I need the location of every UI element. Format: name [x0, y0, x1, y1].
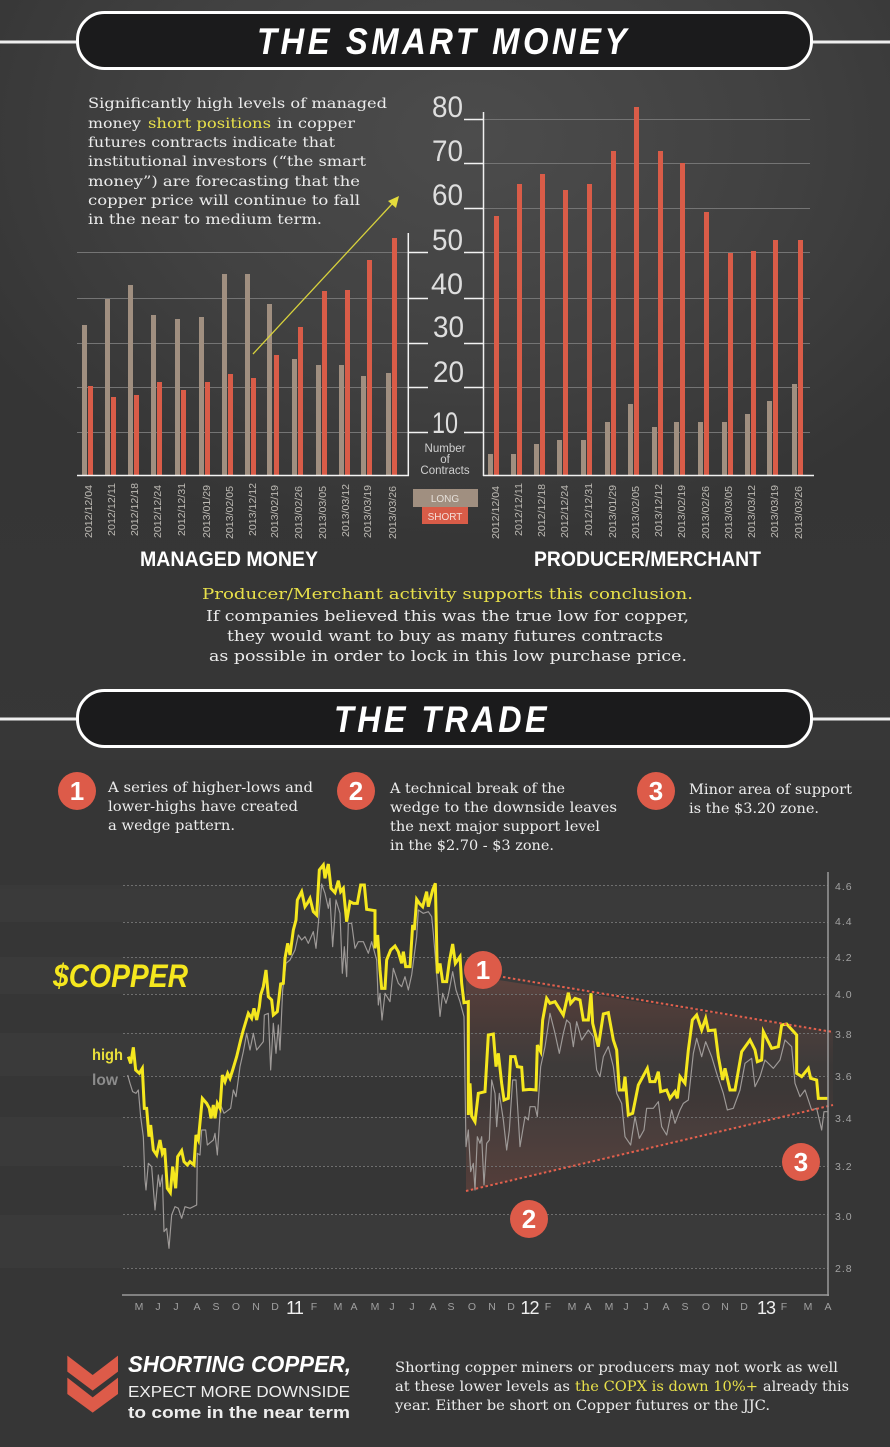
- callout: shorting copper: [128, 1351, 351, 1422]
- long bars: managed money: [82, 274, 391, 475]
- price axis labels: 4.6: [835, 881, 853, 893]
- month axis labels: M: [568, 1301, 576, 1313]
- month axis labels: O: [468, 1301, 476, 1313]
- step 2: the next major support level: [390, 819, 601, 835]
- conclusion text block: [202, 587, 693, 665]
- month axis labels: N: [252, 1301, 260, 1313]
- date labels: managed money: 2013/03/19: [362, 485, 374, 538]
- price axis labels: [835, 881, 853, 1275]
- intro text block: money: [88, 116, 141, 132]
- chart title: producer/merchant: PRODUCER/MERCHANT: [534, 548, 761, 571]
- background bands: [0, 885, 828, 1268]
- date labels: managed money: 2013/03/12: [340, 484, 352, 537]
- chart marker 1: 1: [476, 955, 490, 985]
- wedge trend lines: [466, 977, 833, 1191]
- conclusion text block: they would want to buy as many futures contracts: [227, 629, 663, 645]
- month axis labels: S: [447, 1301, 455, 1313]
- month axis labels: M: [605, 1301, 613, 1313]
- price axis labels: 4.2: [835, 952, 853, 964]
- date labels: producer/merchant: 2012/12/11: [513, 483, 525, 536]
- icon: number badge 1: 1: [70, 776, 84, 806]
- legend: high: high: [92, 1047, 123, 1064]
- month axis labels: M: [334, 1301, 342, 1313]
- text block: copper miners: Shorting copper miners or producers may not work as well: [395, 1360, 839, 1376]
- bar chart: managed money: [77, 233, 428, 476]
- chart marker 3: [782, 1143, 820, 1181]
- date labels: managed money: 2013/12/12: [247, 483, 259, 536]
- step 2: A technical break of the: [389, 781, 565, 797]
- callout: shorting copper: to come in the near term: [128, 1404, 350, 1422]
- date labels: managed money: [83, 483, 399, 539]
- price axis labels: 3.2: [835, 1161, 853, 1173]
- icon: number badge 2: 2: [349, 776, 363, 806]
- short bars: managed money: [88, 238, 397, 475]
- wedge pattern fill: [466, 975, 833, 1191]
- date labels: managed money: 2012/12/31: [176, 483, 188, 536]
- price axis labels: 4.0: [835, 989, 853, 1001]
- long bars: producer/merchant: [488, 384, 797, 475]
- shared axis numbers: 40: [431, 268, 463, 301]
- step 3: [637, 772, 852, 817]
- chart title: managed money: MANAGED MONEY: [140, 548, 318, 571]
- date labels: producer/merchant: 2012/12/24: [559, 485, 571, 538]
- chart title: $copper: $COPPER: [52, 958, 188, 994]
- shared axis numbers: 20: [433, 356, 464, 389]
- date labels: managed money: 2012/12/11: [106, 483, 118, 536]
- text block: copper miners: the COPX is down 10%+: [575, 1379, 758, 1395]
- month axis labels: 13: [757, 1298, 776, 1318]
- date labels: producer/merchant: 2013/02/26: [700, 486, 712, 539]
- chart marker 1: [464, 951, 502, 989]
- axis caption: number of contracts: Contracts: [420, 465, 470, 477]
- month axis labels: A: [662, 1301, 670, 1313]
- step 2: wedge to the downside leaves: [390, 800, 617, 816]
- month axis labels: D: [507, 1301, 515, 1313]
- intro text block: in the near to medium term.: [88, 212, 322, 228]
- arrow: short positions trend: [253, 196, 399, 354]
- shared axis numbers: 50: [432, 224, 463, 257]
- heading bar: the trade: [0, 690, 890, 746]
- heading bar: the smart money: [0, 12, 890, 68]
- date labels: managed money: 2012/12/24: [152, 485, 164, 538]
- date labels: managed money: 2013/01/29: [201, 485, 213, 538]
- month axis labels: F: [781, 1301, 787, 1313]
- icon: number badge 1: [58, 772, 96, 810]
- text block: copper miners: already this: [763, 1379, 849, 1395]
- text block: copper miners: at these lower levels as: [395, 1379, 570, 1395]
- month axis labels: A: [824, 1301, 832, 1313]
- legend: long and short: SHORT: [428, 512, 462, 523]
- intro text block: Significantly high levels of managed: [88, 96, 387, 112]
- shared axis numbers: [431, 91, 464, 440]
- date labels: managed money: 2013/03/26: [387, 486, 399, 539]
- date labels: producer/merchant: 2012/12/18: [536, 484, 548, 537]
- intro text block: futures contracts indicate that: [88, 135, 335, 151]
- shared axis numbers: 30: [433, 311, 464, 344]
- date labels: managed money: 2013/02/19: [269, 485, 281, 538]
- step 1: A series of higher-lows and: [107, 780, 313, 796]
- callout: shorting copper: EXPECT MORE DOWNSIDE: [128, 1384, 350, 1401]
- month axis labels: S: [681, 1301, 689, 1313]
- date labels: producer/merchant: 2013/03/05: [723, 486, 735, 539]
- price axis labels: 3.6: [835, 1071, 853, 1083]
- axis caption: number of contracts: of: [440, 454, 451, 466]
- date labels: producer/merchant: 2013/03/19: [769, 485, 781, 538]
- intro text block: short positions: [148, 116, 271, 132]
- month axis labels: J: [409, 1301, 415, 1313]
- axis caption: number of contracts: Number: [425, 443, 466, 455]
- month axis labels: M: [135, 1301, 143, 1313]
- month axis labels: D: [271, 1301, 279, 1313]
- date labels: managed money: 2013/02/05: [224, 486, 236, 539]
- date labels: managed money: 2013/02/26: [293, 486, 305, 539]
- line chart: copper price: [0, 864, 853, 1318]
- chart marker 2: [510, 1200, 548, 1238]
- heading bar: the smart money: THE SMART MONEY: [257, 21, 630, 62]
- date labels: producer/merchant: [490, 483, 805, 539]
- icon: number badge 2: [337, 772, 375, 810]
- intro text block: in copper: [277, 116, 355, 132]
- date labels: producer/merchant: 2013/02/19: [676, 485, 688, 538]
- month axis labels: O: [232, 1301, 240, 1313]
- legend: long and short: [413, 489, 478, 524]
- step 3: is the $3.20 zone.: [689, 801, 819, 817]
- step 2: in the $2.70 - $3 zone.: [390, 838, 554, 854]
- icon: double down chevron: [67, 1356, 118, 1413]
- date labels: producer/merchant: 2013/01/29: [607, 485, 619, 538]
- month axis labels: M: [371, 1301, 379, 1313]
- heading bar: the trade: THE TRADE: [334, 699, 550, 740]
- month axis labels: F: [311, 1301, 317, 1313]
- intro text block: [88, 96, 387, 228]
- price axis labels: 2.8: [835, 1263, 853, 1275]
- month axis labels: N: [488, 1301, 496, 1313]
- month axis labels: O: [702, 1301, 710, 1313]
- month axis labels: J: [155, 1301, 161, 1313]
- month axis labels: A: [350, 1301, 358, 1313]
- chart marker 3: 3: [794, 1147, 808, 1177]
- date labels: producer/merchant: 2012/12/31: [583, 483, 595, 536]
- month axis labels: A: [429, 1301, 437, 1313]
- month axis labels: 11: [286, 1298, 304, 1318]
- text block: copper miners: [394, 1360, 849, 1414]
- chart marker 2: 2: [522, 1204, 536, 1234]
- date labels: managed money: 2012/12/04: [83, 485, 95, 538]
- icon: number badge 3: 3: [649, 776, 663, 806]
- step 2: [337, 772, 617, 854]
- date labels: managed money: 2012/12/18: [129, 483, 141, 536]
- text block: copper miners: year. Either be short on Copper futures or the JJC.: [394, 1398, 770, 1414]
- month axis labels: [135, 1298, 832, 1318]
- price axis labels: 3.4: [835, 1113, 853, 1125]
- month axis labels: A: [193, 1301, 201, 1313]
- month axis labels: J: [173, 1301, 179, 1313]
- shared axis numbers: 60: [432, 179, 463, 212]
- bar chart: producer/merchant: [464, 107, 814, 476]
- date labels: producer/merchant: 2013/03/26: [793, 486, 805, 539]
- date labels: managed money: 2013/03/05: [317, 486, 329, 539]
- conclusion text block: If companies believed this was the true low for copper,: [206, 609, 689, 625]
- axis caption: number of contracts: [420, 443, 470, 477]
- month axis labels: F: [545, 1301, 551, 1313]
- shared axis numbers: 10: [432, 407, 458, 440]
- date labels: producer/merchant: 2013/02/05: [630, 486, 642, 539]
- month axis labels: M: [804, 1301, 812, 1313]
- month axis labels: D: [740, 1301, 748, 1313]
- month axis labels: 12: [520, 1298, 539, 1318]
- icon: number badge 3: [637, 772, 675, 810]
- conclusion text block: Producer/Merchant activity supports this conclusion.: [202, 587, 693, 603]
- shared axis numbers: 70: [432, 135, 463, 168]
- date labels: producer/merchant: 2013/12/12: [653, 484, 665, 537]
- intro text block: copper price will continue to fall: [88, 193, 361, 209]
- legend: low: low: [92, 1072, 119, 1089]
- date labels: producer/merchant: 2013/03/12: [746, 485, 758, 538]
- step 1: lower-highs have created: [108, 799, 298, 815]
- intro text block: money”) are forecasting that the: [88, 174, 360, 190]
- conclusion text block: as possible in order to lock in this low purchase price.: [209, 649, 687, 665]
- step 1: [58, 772, 313, 834]
- month axis labels: J: [623, 1301, 629, 1313]
- month axis labels: S: [212, 1301, 220, 1313]
- short bars: producer/merchant: [494, 107, 803, 475]
- high price line: [128, 864, 440, 1193]
- chart axes: [122, 872, 829, 1296]
- callout: shorting copper: SHORTING COPPER,: [128, 1351, 351, 1377]
- legend: long and short: LONG: [431, 494, 459, 505]
- low price line: [128, 884, 440, 1248]
- step 3: Minor area of support: [689, 782, 852, 798]
- price axis labels: 3.8: [835, 1029, 853, 1041]
- date labels: producer/merchant: 2012/12/04: [490, 486, 502, 539]
- month axis labels: J: [389, 1301, 395, 1313]
- month axis labels: J: [643, 1301, 649, 1313]
- month axis labels: A: [584, 1301, 592, 1313]
- price axis labels: 4.4: [835, 916, 853, 928]
- intro text block: institutional investors (“the smart: [88, 154, 366, 170]
- shared axis numbers: 80: [432, 91, 463, 124]
- step 1: a wedge pattern.: [108, 818, 235, 834]
- month axis labels: N: [721, 1301, 729, 1313]
- price axis labels: 3.0: [835, 1211, 853, 1223]
